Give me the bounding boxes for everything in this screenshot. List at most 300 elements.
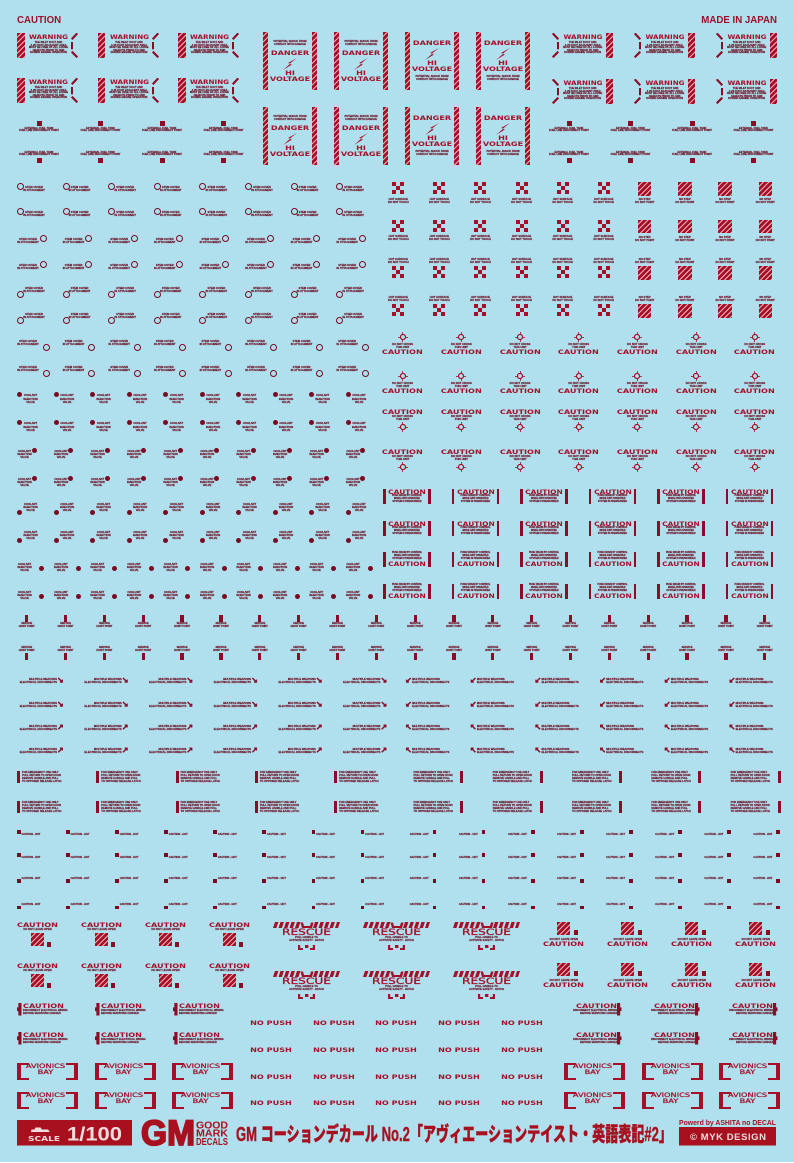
coolant row 2: INJECTION	[60, 426, 74, 428]
arrow row 3: ELECTRICAL DISCONNECTS	[477, 728, 514, 731]
hot surface row 4: HOT SURFACE	[471, 296, 490, 299]
hot row 4: CAUTION - HOT	[365, 903, 384, 906]
notes row 1: REMOVE HANDLE AND PULL	[181, 777, 217, 780]
no push row 4: NO PUSH	[501, 1098, 543, 1106]
coolant row 5: VALVE	[318, 509, 327, 512]
fuel row icon above right: EXTERNAL FUEL TANK	[739, 127, 768, 130]
hoist row bar above: SERVICE	[604, 622, 615, 625]
stem row 8: IN ATTACHMENT	[17, 369, 39, 372]
coolant row 1: COOLANT	[316, 394, 329, 397]
arrow row 1: ELECTRICAL DISCONNECTS	[412, 681, 449, 684]
coolant row 5: VALVE	[245, 509, 254, 512]
hot row 1: CAUTION - HOT	[218, 833, 237, 836]
electrical row 2: DISCONNECT ELECTRICAL WIRING	[101, 1038, 146, 1041]
hot row 4: CAUTION - HOT	[169, 903, 188, 906]
coolant row 3: INJECTION	[163, 453, 178, 456]
danger row 1: VOLTAGE	[483, 65, 523, 73]
coolant row 1: INJECTION	[315, 398, 330, 400]
target row 4: CAUTION	[382, 448, 423, 456]
no push row 4: NO PUSH	[375, 1098, 417, 1106]
target row 4: CAUTION	[734, 448, 775, 456]
hoist row bar below: SERVICE	[643, 646, 654, 649]
bracket row 4: PUSH DRAIN BY CONTROL	[734, 584, 765, 586]
arrow row 2: MULTIPLE WEAPONS	[477, 702, 505, 705]
fuel row icon below: FUEL LINE DISCONNECT POINT	[142, 153, 182, 156]
bracket row 2: PUSH DRAIN BY CONTROL	[597, 527, 628, 529]
target row 1: CAUTION	[441, 348, 482, 356]
bracket row 2: CAUTION	[662, 520, 700, 528]
coolant row 8: VALVE	[203, 597, 211, 600]
danger row 1: VOLTAGE	[270, 75, 310, 83]
avionics row 1 right: AVIONICS	[651, 1062, 690, 1070]
stem row 5: STEM COVER	[71, 287, 88, 290]
hot row 2	[17, 853, 794, 859]
coolant row 5: INJECTION	[23, 506, 38, 509]
coolant row 8: VALVE	[57, 597, 65, 600]
bracket row 1: SYSTEM IS PRESSURIZED	[666, 501, 696, 503]
warning row 1 right: WARNING	[563, 33, 602, 41]
bracket row 1: SYSTEM IS PRESSURIZED	[461, 501, 490, 503]
coolant row 8: INJECTION	[309, 594, 324, 597]
coolant row 4: VALVE	[203, 484, 211, 487]
hot row 4	[17, 903, 794, 906]
fuel row icon below right: FUEL LINE DISCONNECT POINT	[611, 153, 650, 156]
warning row 2: DURING ENGINE OPERATION	[191, 96, 228, 99]
coolant row 5: VALVE	[172, 509, 181, 512]
electrical row 1 right: BEFORE SERVICING HANGER	[736, 1012, 774, 1015]
notes row 2: FOR EMERGENCY USE ONLY	[731, 801, 767, 804]
arrow row 3: ELECTRICAL DISCONNECTS	[214, 728, 251, 731]
notes row 1: REMOVE HANDLE AND PULL	[493, 777, 529, 780]
hoist row bar below: HOIST POINT	[135, 649, 151, 652]
rescue row 1: PULL HANDLE TO	[295, 936, 318, 939]
electrical row 2 right: BEFORE SERVICING HANGER	[580, 1041, 618, 1044]
arrow row 2: MULTIPLE WEAPONS	[606, 702, 634, 705]
bracket row 3: CAUTION	[388, 560, 426, 568]
electrical row 2: DISCONNECT ELECTRICAL WIRING	[23, 1038, 68, 1041]
hot surface row 4: HOT SURFACE	[512, 296, 531, 299]
hoist row bar below: SERVICE	[526, 646, 537, 649]
target row 1: DO NOT CROSS	[510, 343, 530, 346]
rescue row 1	[273, 922, 543, 950]
stem row 4: STEM COVER	[65, 264, 82, 267]
coolant row 8: VALVE	[276, 597, 284, 600]
avionics row 2 right: BAY	[662, 1097, 678, 1105]
target row 1: CAUTION	[676, 348, 717, 356]
hot row 1: CAUTION - HOT	[316, 833, 335, 836]
target row 2: THIS UNIT	[455, 385, 468, 388]
coolant row 1: VALVE	[245, 401, 254, 404]
hoist row bar below: HOIST POINT	[291, 649, 307, 652]
stem row 5: STEM COVER	[344, 287, 362, 290]
scale badge: SCALE	[28, 1135, 60, 1143]
stem row 1: STEM COVER	[71, 186, 88, 189]
coolant row 8: INJECTION	[273, 594, 287, 597]
warning row 1: OBJECTS PRIOR TO AND	[33, 48, 64, 52]
no step row 1: DO NOT PAINT	[716, 201, 735, 204]
coolant row 4: INJECTION	[90, 481, 105, 484]
coolant row 5: COOLANT	[133, 502, 147, 506]
arrow row 2: ELECTRICAL DISCONNECTS	[606, 705, 643, 708]
danger row 2: CONTACT WITH DAMAGE	[416, 152, 448, 156]
coolant row 2: VALVE	[172, 429, 181, 432]
stem row 7: STEM COVER	[247, 340, 265, 343]
bracket row 3: MODE ANTI OPERATED	[531, 555, 557, 557]
hoist row bar above: SERVICE	[215, 622, 226, 625]
coolant row 8: COOLANT	[346, 590, 360, 594]
arrow row 3: MULTIPLE WEAPONS	[412, 725, 440, 728]
coolant row 5: COOLANT	[97, 502, 110, 506]
fuel row icon above right: FUEL LINE DISCONNECT POINT	[672, 129, 712, 132]
bracket row 1: SYSTEM IS PRESSURIZED	[735, 501, 764, 503]
avionics row 1: AVIONICS	[181, 1062, 221, 1070]
coolant row 2: COOLANT	[316, 422, 329, 425]
arrow row 1: MULTIPLE WEAPONS	[29, 678, 57, 681]
leave open row 2 right: DO NOT LEAVE OPEN	[614, 979, 642, 982]
warning row 2: MUST BE FREE OF ALL LOOSE	[109, 91, 149, 94]
bracket row 3: CAUTION	[662, 560, 700, 568]
hoist row bar below: HOIST POINT	[524, 649, 540, 652]
arrow row 2: MULTIPLE WEAPONS	[94, 702, 122, 705]
warning row 2 right: A 25 FOOT ADJACENT AREA	[729, 90, 765, 92]
hot row 2: CAUTION - HOT	[71, 856, 89, 859]
arrow row 2: ELECTRICAL DISCONNECTS	[214, 705, 251, 708]
coolant row 1: INJECTION	[352, 398, 366, 400]
stem row 4: STEM COVER	[247, 264, 265, 267]
warning row 2: MUST BE FREE OF ALL LOOSE	[190, 91, 229, 94]
coolant row 1: VALVE	[318, 401, 327, 404]
stem row 8: STEM COVER	[201, 366, 219, 369]
warning row 1 right: THE INLET DUCT AND	[651, 41, 678, 44]
bracket row 2: SYSTEM IS PRESSURIZED	[735, 533, 764, 535]
hoist row bar above: HOIST POINT	[446, 625, 462, 628]
coolant row 7: VALVE	[203, 569, 211, 572]
scale badge	[17, 1120, 132, 1146]
arrow row 2: ELECTRICAL DISCONNECTS	[412, 705, 449, 708]
bracket row 3: MODE ANTI OPERATED	[736, 555, 763, 557]
arrow row 1: MULTIPLE WEAPONS	[542, 678, 569, 681]
arrow row 4: ELECTRICAL DISCONNECTS	[343, 751, 380, 754]
stem row 2: IN ATTACHMENT	[206, 214, 227, 217]
arrow row 4: MULTIPLE WEAPONS	[671, 748, 699, 751]
danger row 1: POTENTIAL SHOCK FROM	[344, 40, 378, 43]
coolant row 7: INJECTION	[236, 566, 251, 569]
no push row 3	[250, 1074, 543, 1080]
arrow row 1: ELECTRICAL DISCONNECTS	[606, 681, 643, 684]
hot row 3: CAUTION - HOT	[365, 876, 384, 880]
stem row 1: STEM COVER	[253, 186, 271, 189]
stem row 7	[17, 340, 369, 351]
warning row 2 right: WARNING	[727, 79, 766, 87]
leave open row 2	[17, 963, 273, 987]
hoist row bar above: HOIST POINT	[174, 625, 190, 628]
hoist row bar below: HOIST POINT	[407, 649, 423, 652]
hot surface row 4: HOT SURFACE	[389, 296, 408, 299]
fuel row icon below	[19, 150, 244, 163]
hot row 3: CAUTION - HOT	[22, 876, 40, 880]
stem row 5: IN ATTACHMENT	[160, 290, 182, 293]
notes row 2: TO OPPOSED RELEASE LATCH	[101, 810, 141, 813]
stem row 4: STEM COVER	[19, 264, 37, 267]
target row 3: DO NOT CROSS	[451, 415, 472, 418]
no step row 4: NO STEP	[759, 296, 771, 299]
electrical row 1 right: CAUTION	[732, 1002, 773, 1010]
notes row 1: TO OPPOSED RELEASE LATCH	[181, 780, 220, 783]
arrow row 2: MULTIPLE WEAPONS	[353, 702, 380, 705]
stem row 2: IN ATTACHMENT	[297, 214, 318, 217]
arrow row 1: MULTIPLE WEAPONS	[158, 678, 186, 681]
rescue row 2: ACTIVATE SAFETY - HATCH	[289, 988, 324, 990]
arrow row 2: MULTIPLE WEAPONS	[412, 702, 440, 705]
hoist row bar above: HOIST POINT	[213, 625, 229, 628]
arrow row 4: ELECTRICAL DISCONNECTS	[736, 751, 773, 754]
stem row 8: IN ATTACHMENT	[108, 369, 130, 372]
coolant row 4: COOLANT	[164, 478, 177, 481]
notes row 1: REMOVE HANDLE AND PULL	[260, 777, 296, 780]
hoist row bar below: HOIST POINT	[19, 649, 35, 652]
arrow row 4: MULTIPLE WEAPONS	[158, 748, 186, 751]
hoist row bar above: SERVICE	[449, 622, 459, 625]
coolant row 3: COOLANT	[54, 450, 68, 453]
warning row 1: A 25 FOOT ADJACENT AREA	[111, 44, 147, 46]
bracket row 4: SYSTEM IS PRESSURIZED	[529, 590, 559, 592]
warning row 1: DURING ENGINE OPERATION	[191, 51, 228, 54]
notes row 2: REMOVE HANDLE AND PULL	[651, 807, 688, 810]
coolant row 8: COOLANT	[200, 590, 214, 594]
hoist row bar above: SERVICE	[138, 622, 149, 625]
coolant row 3: VALVE	[239, 456, 248, 459]
hoist row bar below: SERVICE	[293, 646, 304, 649]
coolant row 5: INJECTION	[133, 506, 147, 509]
stem row 8: STEM COVER	[293, 366, 310, 369]
coolant row 6: VALVE	[26, 537, 35, 540]
hoist row bar below: SERVICE	[21, 646, 32, 649]
danger row 2: CONTACT WITH DAMAGE	[345, 118, 377, 120]
coolant row 6: INJECTION	[352, 534, 366, 537]
coolant row 7: INJECTION	[90, 566, 105, 569]
stem row 5: IN ATTACHMENT	[251, 290, 273, 293]
warning row 1 right: DURING ENGINE OPERATION	[564, 51, 601, 54]
fuel row icon above: EXTERNAL FUEL TANK	[24, 127, 54, 130]
no push row 2: NO PUSH	[501, 1046, 543, 1054]
coolant row 7: COOLANT	[54, 562, 68, 566]
no push row 1: NO PUSH	[438, 1019, 480, 1027]
electrical row 2 right: DISCONNECT ELECTRICAL WIRING	[573, 1038, 618, 1041]
coolant row 5: INJECTION	[352, 506, 366, 509]
hoist row bar above: HOIST POINT	[640, 625, 656, 628]
target row 3	[373, 409, 784, 432]
coolant row 4: INJECTION	[54, 481, 68, 484]
stem row 2: STEM COVER	[25, 211, 43, 214]
warning row 1: DURING ENGINE OPERATION	[111, 51, 147, 54]
bracket row 3: PUSH DRAIN BY CONTROL	[666, 552, 696, 554]
warning row 2: DURING ENGINE OPERATION	[111, 96, 147, 99]
notes row 1: PULL RETURN TO OPEN DOOR	[413, 774, 453, 777]
no step row 4: NO STEP	[719, 296, 731, 299]
no push row 4	[250, 1100, 543, 1106]
coolant row 5: VALVE	[26, 509, 35, 512]
arrow row 3: ELECTRICAL DISCONNECTS	[84, 728, 122, 731]
stem row 7: IN ATTACHMENT	[154, 343, 176, 346]
hoist row bar below: SERVICE	[410, 646, 421, 649]
stem row 4: STEM COVER	[293, 264, 310, 267]
avionics row 1 right: AVIONICS	[728, 1062, 768, 1070]
stem row 7: STEM COVER	[201, 340, 219, 343]
danger row 2: HI	[285, 144, 295, 152]
warning row 1: OBJECTS PRIOR TO AND	[194, 48, 225, 52]
scale badge: 1/100	[67, 1124, 122, 1146]
target row 1: THIS UNIT	[631, 346, 644, 349]
target row 2: THIS UNIT	[748, 385, 761, 388]
stem row 7: IN ATTACHMENT	[108, 343, 130, 346]
stem row 1: STEM COVER	[25, 186, 43, 189]
stem row 1: IN ATTACHMENT	[251, 189, 273, 192]
leave open row 2 right: DO NOT LEAVE OPEN	[742, 979, 770, 982]
hot surface row 4: HOT SURFACE	[594, 296, 613, 299]
coolant row 1: VALVE	[136, 401, 144, 404]
electrical row 1	[17, 1003, 251, 1016]
danger row 2: POTENTIAL SHOCK FROM	[273, 115, 307, 118]
coolant row 8: INJECTION	[17, 594, 32, 597]
coolant row 2: COOLANT	[24, 422, 37, 425]
electrical row 2: CAUTION	[179, 1031, 220, 1039]
hoist row bar above: HOIST POINT	[252, 625, 268, 628]
hoist row bar below: SERVICE	[371, 646, 382, 649]
stem row 8: IN ATTACHMENT	[154, 369, 176, 372]
coolant row 7: VALVE	[312, 569, 321, 572]
coolant row 7: VALVE	[239, 569, 248, 572]
hoist row bar below	[7, 647, 784, 660]
coolant row 5	[17, 502, 366, 515]
hot surface row 2: DO NOT TOUCH	[552, 238, 573, 241]
coolant row 7: COOLANT	[18, 562, 31, 566]
panel: hot surface checker icons	[388, 182, 614, 316]
notes row 2: TO OPPOSED RELEASE LATCH	[260, 810, 299, 813]
warning row 2: OBJECTS PRIOR TO AND	[194, 94, 225, 96]
warning row 1 right: MUST BE FREE OF ALL LOOSE	[645, 46, 684, 49]
hoist row bar above: SERVICE	[99, 622, 110, 625]
hot row 4: CAUTION - HOT	[22, 903, 40, 906]
stem row 1: STEM COVER	[344, 186, 362, 189]
coolant row 3: COOLANT	[18, 450, 31, 453]
danger row 1: DANGER	[413, 38, 451, 46]
warning row 2: THE INLET DUCT AND	[196, 86, 223, 89]
hot row 3: CAUTION - HOT	[410, 876, 429, 880]
arrow row 2: MULTIPLE WEAPONS	[288, 702, 316, 705]
coolant row 7: INJECTION	[346, 566, 360, 569]
coolant row 1: INJECTION	[60, 398, 74, 400]
coolant row 1: INJECTION	[96, 398, 111, 400]
bracket row 4: PUSH DRAIN BY CONTROL	[392, 584, 422, 586]
stem row 3: IN ATTACHMENT	[108, 241, 130, 244]
target row 2: THIS UNIT	[631, 385, 644, 388]
notes row 1: PULL RETURN TO OPEN DOOR	[493, 774, 532, 777]
arrow row 2: ELECTRICAL DISCONNECTS	[20, 705, 57, 708]
arrow row 1: ELECTRICAL DISCONNECTS	[343, 681, 380, 684]
fuel row icon below right	[549, 150, 774, 163]
target row 2: THIS UNIT	[690, 385, 703, 388]
bracket row 2: CAUTION	[731, 520, 768, 528]
hot row 2: CAUTION - HOT	[459, 856, 478, 859]
notes row 1: TO OPPOSED RELEASE LATCH	[22, 780, 61, 783]
bracket row 2	[383, 521, 794, 536]
hot row 1: CAUTION - HOT	[508, 833, 527, 836]
bracket row 2: MODE ANTI OPERATED	[531, 530, 557, 532]
arrow row 4: MULTIPLE WEAPONS	[477, 748, 505, 751]
danger row 2: DANGER	[484, 114, 522, 122]
stem row 6: IN ATTACHMENT	[69, 316, 90, 319]
coolant row 2: VALVE	[245, 429, 254, 432]
warning row 2	[17, 78, 239, 103]
bracket row 1: MODE ANTI OPERATED	[599, 498, 626, 500]
fuel row icon above right: EXTERNAL FUEL TANK	[677, 127, 707, 130]
bracket row 4: CAUTION	[457, 592, 494, 600]
warning row 2 right: DURING ENGINE OPERATION	[564, 97, 601, 100]
notes row 2: REMOVE HANDLE AND PULL	[572, 807, 609, 810]
electrical row 2 right	[564, 1032, 794, 1045]
hoist row bar below: HOIST POINT	[446, 649, 462, 652]
no push row 3: NO PUSH	[375, 1072, 417, 1080]
arrow row 1: ELECTRICAL DISCONNECTS	[214, 681, 251, 684]
electrical row 1 right	[564, 1003, 794, 1016]
danger row 1: VOLTAGE	[412, 65, 452, 73]
stem row 2: IN ATTACHMENT	[69, 214, 90, 217]
target row 4: DO NOT CROSS	[392, 455, 413, 458]
arrow row 3: MULTIPLE WEAPONS	[736, 725, 763, 728]
notes row 2: PULL RETURN TO OPEN DOOR	[493, 804, 532, 807]
warning row 1	[17, 33, 239, 58]
stem row 1: IN ATTACHMENT	[23, 189, 45, 192]
electrical row 2 right: DISCONNECT ELECTRICAL WIRING	[729, 1038, 774, 1041]
bracket row 3: PUSH DRAIN BY CONTROL	[392, 552, 422, 554]
arrow row 2: ELECTRICAL DISCONNECTS	[343, 705, 380, 708]
coolant row 3: COOLANT	[164, 450, 177, 453]
no step row 3: NO STEP	[759, 258, 771, 261]
warning row 1: DURING ENGINE OPERATION	[30, 51, 67, 54]
notes row 1: FOR EMERGENCY USE ONLY	[413, 771, 450, 774]
no step row 4: DO NOT PAINT	[635, 299, 654, 302]
coolant row 8: INJECTION	[200, 594, 214, 597]
coolant row 3: COOLANT	[200, 450, 214, 453]
fuel row icon below: FUEL LINE DISCONNECT POINT	[19, 153, 59, 156]
coolant row 4: VALVE	[57, 484, 65, 487]
bracket row 3	[383, 552, 794, 567]
coolant row 8	[17, 590, 373, 600]
stem row 4: STEM COVER	[156, 264, 174, 267]
notes row 1: TO OPPOSED RELEASE LATCH	[572, 780, 611, 783]
stem row 6: STEM COVER	[207, 313, 225, 316]
coolant row 6: VALVE	[318, 537, 327, 540]
bracket row 1: SYSTEM IS PRESSURIZED	[392, 501, 422, 503]
warning row 1 right: WARNING	[645, 33, 684, 41]
stem row 5: IN ATTACHMENT	[114, 290, 136, 293]
notes row 2	[17, 801, 794, 813]
coolant row 7: VALVE	[349, 569, 357, 572]
fuel row icon below right: EXTERNAL FUEL TANK	[677, 151, 707, 154]
stem row 1: STEM COVER	[207, 186, 225, 189]
rescue row 2	[273, 971, 543, 999]
stem row 3: IN ATTACHMENT	[200, 241, 221, 244]
electrical row 1: BEFORE SERVICING HANGER	[101, 1012, 139, 1015]
stem row 1: IN ATTACHMENT	[297, 189, 318, 192]
hot row 3: CAUTION - HOT	[459, 876, 478, 880]
stem row 1: IN ATTACHMENT	[206, 189, 227, 192]
target row 4: DO NOT CROSS	[627, 455, 648, 458]
coolant row 4: INJECTION	[309, 481, 324, 484]
danger row 2: POTENTIAL SHOCK FROM	[344, 115, 378, 118]
hot surface row 3: HOT SURFACE	[594, 258, 613, 261]
hot row 2: CAUTION - HOT	[606, 856, 625, 859]
